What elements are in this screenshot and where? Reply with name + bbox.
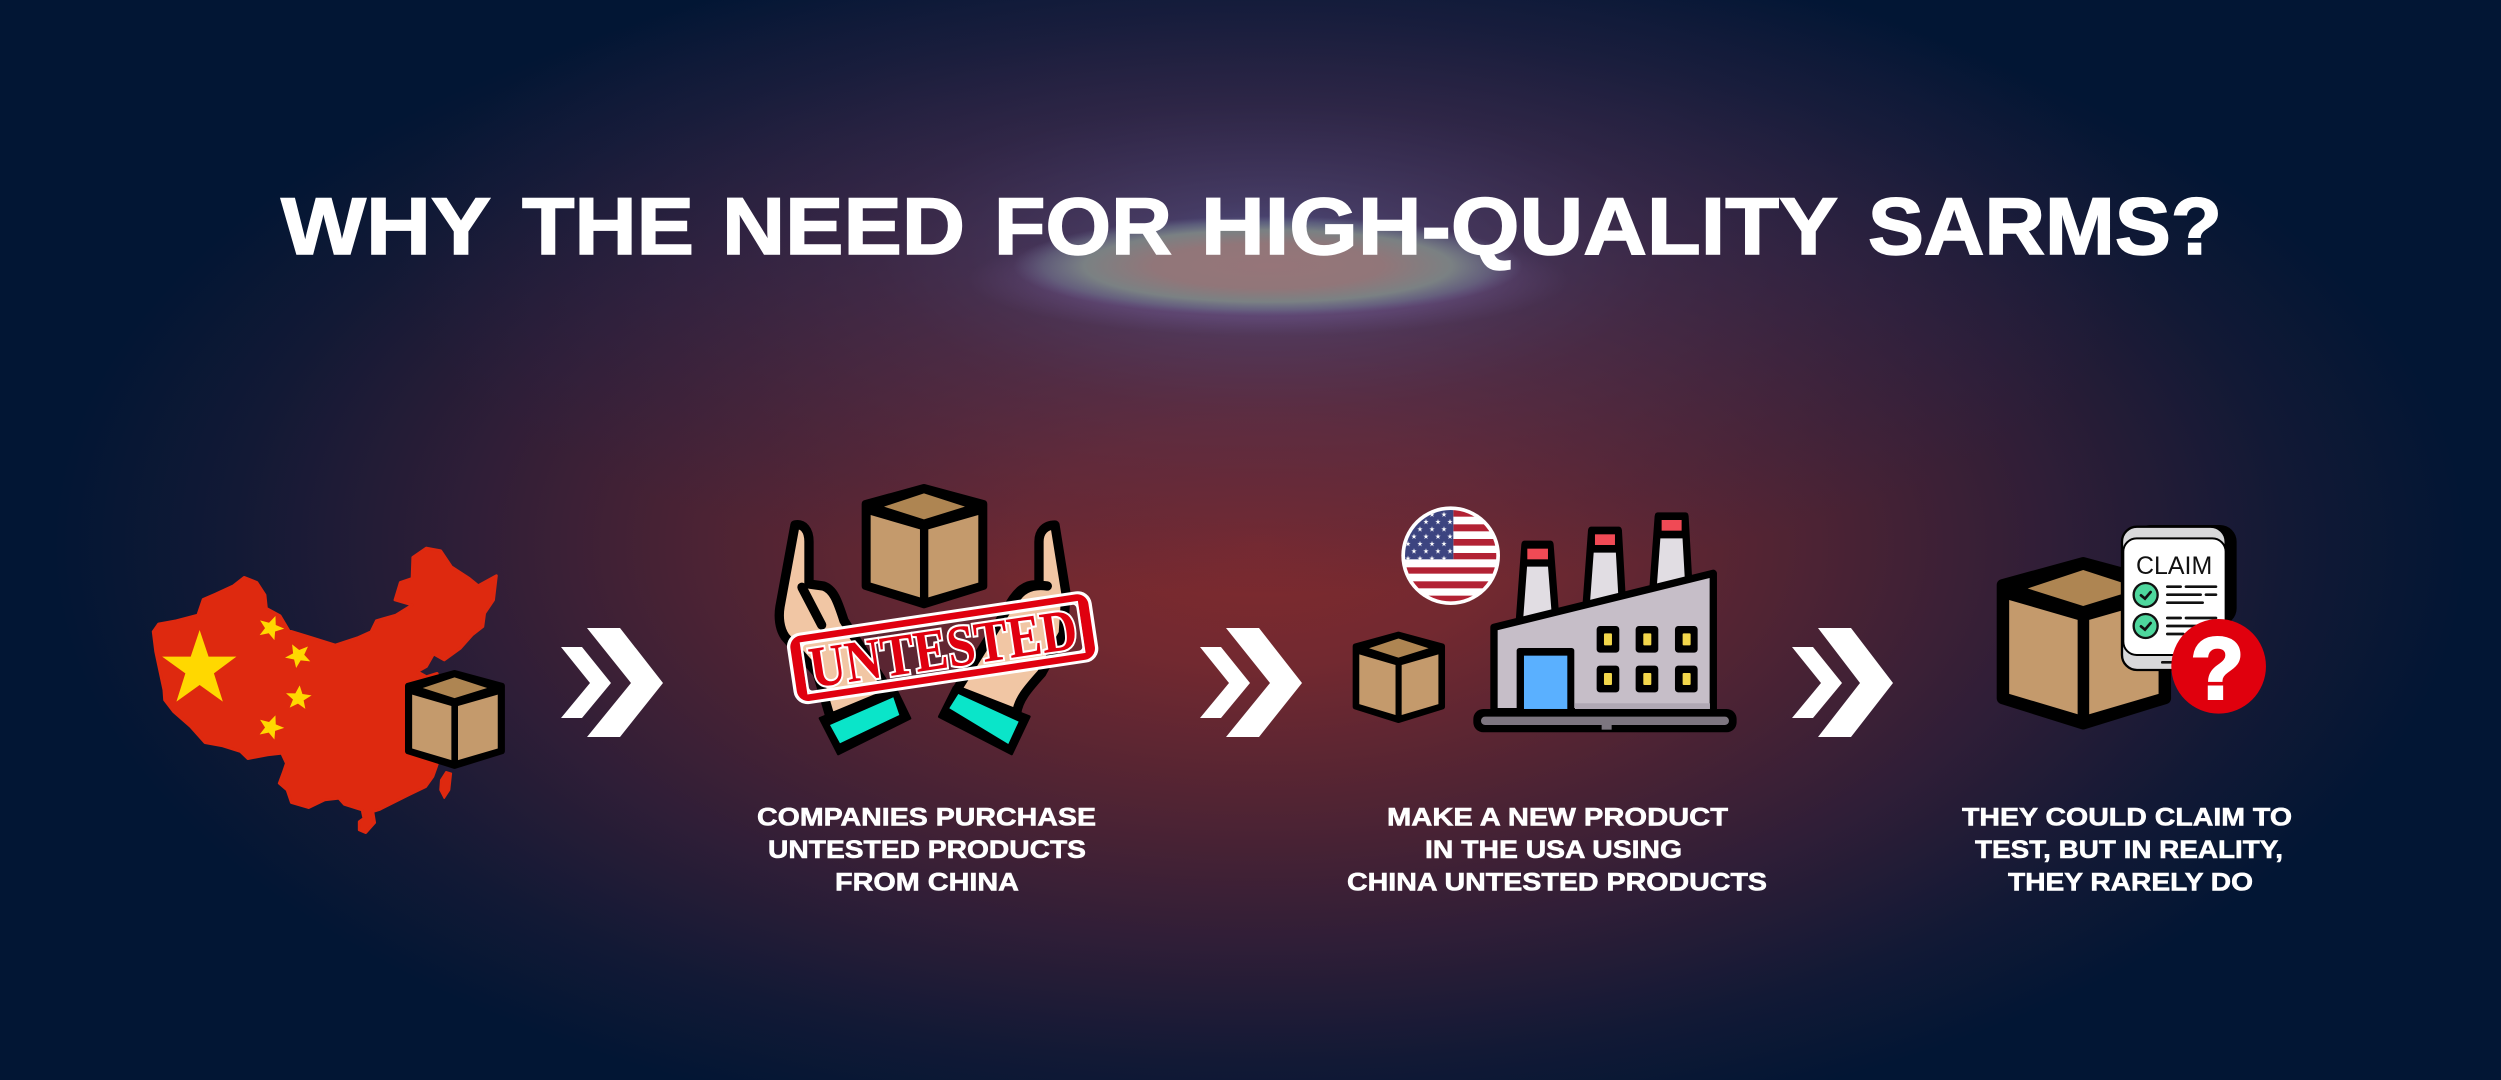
title: FOR xyxy=(994,182,1172,272)
caption: companies purchase: COMPANIES PURCHASE xyxy=(757,804,1096,832)
caption: companies purchase: UNTESTED PRODUCTS xyxy=(768,836,1086,864)
door xyxy=(1517,648,1574,713)
icon: hands with untested stamp xyxy=(779,488,1100,754)
arrow 2 xyxy=(1200,628,1302,737)
caption: companies purchase xyxy=(757,804,1096,896)
question badge: ? xyxy=(2191,619,2244,717)
icon: box with claim and question mark xyxy=(2002,525,2266,724)
claim phone: CLAIM xyxy=(2136,552,2212,580)
icon: factory with flag and box xyxy=(1356,506,1737,732)
icon: China map with box xyxy=(153,548,502,833)
arrow 3 xyxy=(1792,628,1893,737)
title: THE xyxy=(522,182,694,272)
caption: make a new product: IN THE USA USING xyxy=(1425,836,1682,864)
icon: box xyxy=(2002,563,2166,724)
caption: they could claim: THEY COULD CLAIM TO xyxy=(1962,804,2292,832)
China map flag xyxy=(153,548,496,833)
caption: make a new product xyxy=(1347,804,1767,896)
title: NEED xyxy=(722,182,965,272)
icon: box xyxy=(866,488,983,604)
left hand xyxy=(779,525,910,754)
caption: make a new product: CHINA UNTESTED PRODUCTS xyxy=(1347,868,1767,896)
title: WHY xyxy=(281,182,491,272)
arrow 1 xyxy=(561,628,663,737)
title: SARMS? xyxy=(1868,182,2222,272)
caption: they could claim xyxy=(1962,804,2292,896)
question badge xyxy=(2171,619,2266,717)
building xyxy=(1494,573,1713,712)
caption: they could claim: TEST, BUT IN REALITY, xyxy=(1975,836,2283,864)
title: HIGH-QUALITY xyxy=(1201,182,1838,272)
windows xyxy=(1597,626,1698,692)
title xyxy=(281,182,2222,272)
icon: US flag xyxy=(1401,506,1500,605)
icon: box xyxy=(1356,635,1442,720)
claim phone xyxy=(2122,525,2237,670)
caption: companies purchase: FROM CHINA xyxy=(835,868,1019,896)
caption: make a new product: MAKE A NEW PRODUCT xyxy=(1387,804,1728,832)
untested stamp: UNTESTED xyxy=(805,596,1081,701)
chimneys xyxy=(1519,512,1689,622)
right hand xyxy=(939,525,1066,754)
caption: they could claim: THEY RARELY DO xyxy=(2008,868,2253,896)
icon: box xyxy=(408,673,502,766)
factory base xyxy=(1473,709,1737,732)
